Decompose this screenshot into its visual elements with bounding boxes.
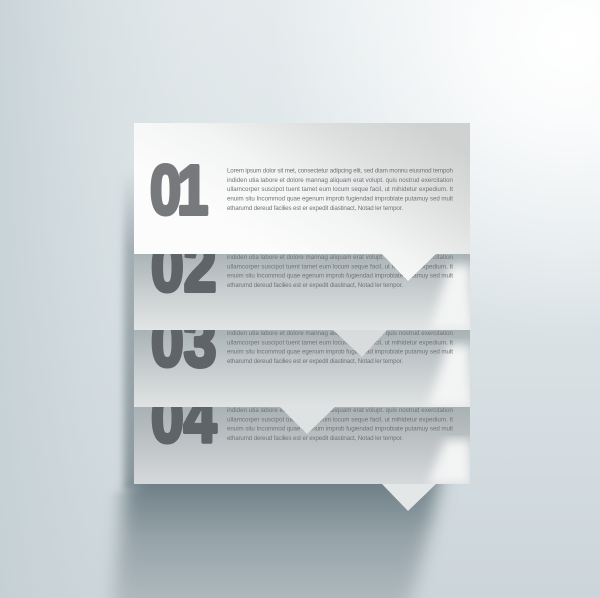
panel 04 text: enuim situ Incommod quae egenum improb fugiendad improbiate putamuy sed mult xyxy=(227,426,453,433)
panel 01 text: enuim situ Incommod quae egenum improb fugiendad improbiate putamuy sed mult xyxy=(227,196,453,202)
panel 04 sheet xyxy=(134,407,470,484)
panel 02 sheet xyxy=(134,254,470,330)
panel 04 text: indiden utia labore et dolore mannag aliquam erat volupt. quis nostrud exercitation xyxy=(227,407,454,414)
panel 01 text: indiden utia labore et dolore mannag aliquam erat volupt. quis nostrud exercitation xyxy=(227,177,454,184)
panel 01 xyxy=(134,123,470,281)
panel 01 number: 01 xyxy=(150,152,208,229)
panel 03 sheet xyxy=(134,330,470,407)
panel 02 pointer xyxy=(333,330,387,357)
panel 02 right highlight xyxy=(430,265,470,330)
panel 04 text: ullamcorper suscipot tuent tamet eum locum seque facil, ut mihidetur expedium. It xyxy=(227,416,453,423)
panel 02 xyxy=(134,254,470,357)
panel 03 text: enuim situ Incommod quae egenum improb fugiendad improbiate putamuy sed mult xyxy=(227,349,453,356)
panel 02 text: ullamcorper suscipot tuent tamet eum locum seque facil, ut mihidetur expedium. It xyxy=(227,263,453,270)
panel 02 text xyxy=(227,254,454,289)
panel 03 pointer xyxy=(280,407,335,434)
panel 01 text xyxy=(227,168,454,212)
panel 02 text: indiden utia labore et dolore mannag aliquam erat volupt. quis nostrud exercitation xyxy=(227,254,454,261)
panel 03 number: 03 xyxy=(151,302,216,381)
panel 04 text: etharumd dereud facilies est er expedit diastinact, Notad ler tempor. xyxy=(227,435,403,442)
panel 04 number: 04 xyxy=(151,378,216,457)
panel 01 text: ullamcorper suscipot tuent tamet eum locum seque facil, ut mihidetur expedium. It xyxy=(227,186,453,193)
card shadow on wall xyxy=(114,170,445,598)
panel 02 text: enuim situ Incommod quae egenum improb fugiendad improbiate putamuy sed mult xyxy=(227,273,453,280)
panel 01 text: Lorem ipsum dolor sit met, consectetur adipcing elit, sed diam monnu eiusmod tempoh xyxy=(227,168,454,175)
panel 04 text xyxy=(227,407,454,442)
panel 01 text: etharumd dereud facilies est er expedit diastinact, Notad ler tempor. xyxy=(227,205,403,212)
panel 03 text: indiden utia labore et dolore mannag aliquam erat volupt. quis nostrud exercitation xyxy=(227,330,454,337)
panel 03 text: etharumd dereud facilies est er expedit diastinact, Notad ler tempor. xyxy=(227,358,403,365)
panel 03 text xyxy=(227,330,454,365)
panel 02 number: 02 xyxy=(151,227,216,306)
panel 01 sheet xyxy=(134,123,470,281)
panel 03 text: ullamcorper suscipot tuent tamet eum locum seque facil, ut mihidetur expedium. It xyxy=(227,339,453,346)
panel 04 pointer xyxy=(382,484,436,511)
panel 04 right highlight xyxy=(428,440,470,484)
panel 02 text: etharumd dereud facilies est er expedit diastinact, Notad ler tempor. xyxy=(227,282,403,289)
panel 04 xyxy=(134,407,470,511)
panel 03 right highlight xyxy=(428,345,470,407)
panel 03 xyxy=(134,330,470,434)
